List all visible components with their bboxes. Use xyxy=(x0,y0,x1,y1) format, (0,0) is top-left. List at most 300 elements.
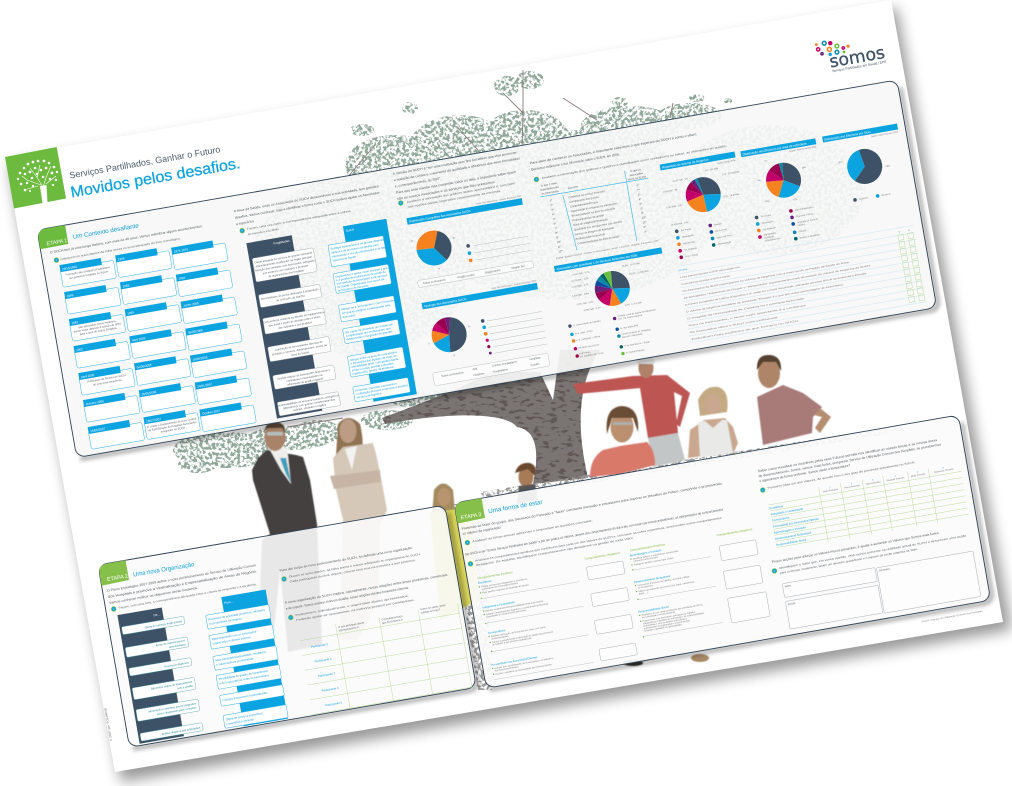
chart: efectivos por area: Área Administrativa xyxy=(795,206,815,212)
step instruction: organigrama xyxy=(281,552,422,585)
SUCH column: Associado xyxy=(342,313,356,319)
table: factores: 3º xyxy=(551,207,554,212)
intro text: O SUCH tem já uma longa história, com mais de 40 anos. Vamos relembrar alguns acontecimentos. xyxy=(50,224,203,255)
table: factores: 1º xyxy=(549,198,552,203)
chart: associados com actividade: H. Universidade de Coimbra xyxy=(573,319,602,327)
fragilidades column: de organizações dos hospitais xyxy=(268,268,305,278)
positive behaviours right: Assegurar, permite e pensar fazer melhor. xyxy=(634,556,675,566)
fragilidades column: maioritariamente localizados na região principal, xyxy=(255,255,313,268)
timeline column 2: de Esterilização de Hospitais Associados xyxy=(148,420,197,432)
table: factores: 2º xyxy=(640,206,643,211)
missao text: A missão do SUCH é "ser uma instituição sem fins lucrativos que visa promover xyxy=(392,150,518,176)
positive behaviours right: profissionais e com as aptidões específicas a xyxy=(643,617,688,628)
chart: volume de negocios: Repartição do Volume de Negócios xyxy=(662,157,709,170)
fragilidades column: Fragilidades xyxy=(273,239,290,246)
values rating table: Desenvolvimento Sustentável xyxy=(775,530,812,541)
step instruction: relations: C xyxy=(290,617,292,619)
timeline column 3 xyxy=(171,238,256,432)
chart: efectivos por area: 18% xyxy=(765,201,770,203)
table: factores: 11º xyxy=(642,220,647,225)
table: factores: 9º xyxy=(556,235,559,240)
chart: associados com actividade: H. S. João – Porto xyxy=(575,329,594,336)
timeline column 2: 1995 xyxy=(127,310,135,315)
column: para xyxy=(203,589,288,729)
table: factores: O que os xyxy=(630,167,642,173)
timeline column 3: 1973-1975 xyxy=(173,247,189,254)
participants table: Participante 1 xyxy=(311,642,329,649)
chart: tipologia dos associados: Fundos xyxy=(530,362,540,367)
positive behaviours left: Partilhar informação, de forma aberta e clara, com outras xyxy=(491,625,547,638)
chart: volume de negocios: 7.292,5M€ · 10% xyxy=(666,205,683,210)
missao text xyxy=(392,150,524,201)
chart: efectivos por area: Instalação xyxy=(764,235,775,240)
table: factores: 4º xyxy=(638,197,641,201)
chart: efectivos por sexo: 35% xyxy=(838,161,843,164)
chart: associados com actividade: Associados com actividade 1 de Serviços Atribuídos em 2006 xyxy=(556,253,638,271)
true or false checklist: As actividades "Tratamento de Roupa" e "Alimentação" representaram mais da metade do Volume de Negócios do SUCH. xyxy=(683,264,872,300)
chart: associados com actividade: 3.073,2M€ · 4,2% xyxy=(571,278,589,283)
chart: associados com actividade: (CH, CS, Pedro Hispano) xyxy=(618,314,643,321)
logo: somos xyxy=(815,31,887,75)
copyright: © 2007 por SOLARGE xyxy=(103,707,113,742)
timeline column 1: Outubro 2006 xyxy=(85,399,104,406)
tree branches above xyxy=(287,70,673,427)
table: factores: 8º xyxy=(555,231,558,235)
table: factores: 11º xyxy=(557,244,562,249)
timeline column 1: Abril 2006 xyxy=(81,373,95,379)
chart: volume de negocios: Administração xyxy=(717,241,732,246)
table: factores: 7º xyxy=(554,226,557,230)
etapa 3 intro: Pretende-se fazer do grupo, dos Sucessos do Passado e "fazer" constante inovação e entusiasmo para superar os Desafios do Futuro, cumprindo e promovendo xyxy=(461,481,722,531)
participants table: Participante 2 xyxy=(314,657,332,664)
chart: associados com actividade: Macedo e Mirandela) xyxy=(622,332,643,339)
participants table: interno/externo é: xyxy=(338,625,360,632)
chart: volume de negocios: Tot. Roupa xyxy=(680,227,692,232)
SUCH column: desenvolvem uma gestão de grandes xyxy=(346,329,393,341)
areas de saude intro: desafios. Vamos continuar: logo a identificar a forma como o SUCH poderá ajudar os Associados xyxy=(235,190,380,220)
table: factores: 12º xyxy=(558,249,563,254)
etapa 2 intro: Vamos conhecer melhor os objectivos desta mudança. xyxy=(109,586,198,605)
reinforce text: e agarrarmos de forma uniforme. Vamos medir a temperatura? xyxy=(759,463,851,483)
column: de: Processos dispersos xyxy=(164,660,190,669)
values rating table: Muito Presente xyxy=(911,472,926,478)
logo: wordmark: somos xyxy=(828,43,887,72)
table: factores: Capacidade de resposta às solicitações xyxy=(570,201,618,213)
fragilidades column: de currículos da marcha xyxy=(276,293,305,302)
timeline column 2: 26/05/2006 xyxy=(141,390,157,396)
fragilidades column: Grande volume de transacções financeiras e xyxy=(277,368,331,381)
form box: desenho xyxy=(876,551,981,613)
values rating table: 3 xyxy=(872,479,874,482)
person: red long-sleeved shirt xyxy=(573,356,690,467)
step instruction: identifiquem: para o reforçar. Finalmente, façam um desenho quantificado e o impacto da acção proposta na Valor. xyxy=(780,547,918,575)
timeline column 3: Outubro 2007 xyxy=(202,409,221,416)
perceptions intro: Para além de conhecer os Associados, é importante sabermos o que esperam do SUCH e como o vêem. xyxy=(530,132,698,165)
column: para: Funções transversais especializadas xyxy=(222,690,268,702)
reinforce text: de desenvolvimento. Juntos, vamos, mais fortes, enriquecer Serviço de Utilização Comum dos Hospitais, se percebermos xyxy=(758,442,942,478)
values rating table: Responsabilidade Social xyxy=(776,538,807,547)
positive behaviours left: Comportamentos Positivos xyxy=(477,570,513,580)
step instruction: pontuem xyxy=(760,460,916,493)
column: de: Informação e sistemas pouco integrados xyxy=(148,701,197,714)
step 3 instruction: Analisem a informação dos gráficos abaixo apresentados e, com base xyxy=(406,181,516,204)
true or false checklist: O Hospital da Universidade de Coimbra foi o principal Associado. xyxy=(687,297,806,320)
positive behaviours left: Assumir compromissos/responsabilidade pelas suas acções. xyxy=(485,599,544,613)
column: para: Relacionamento com os Associados xyxy=(211,629,257,641)
timeline column 1: Publicação da Revista do SUCH xyxy=(87,373,126,384)
fragilidades column: produtos e serviços, departamentos, dentro da xyxy=(272,343,328,356)
participants table: Como se sente, pode xyxy=(420,603,446,611)
chart: volume de negocios: Dados: Relat. 2006 xyxy=(717,159,736,165)
table: factores: Presença/Apoio na área de actuação xyxy=(571,206,616,218)
chart: associados com actividade: 5.000,7M€ · 6,9% xyxy=(577,301,594,306)
true or false checklist: A maior parte dos Associados do SUCH está em Região Norte. xyxy=(680,266,741,279)
SUCH column: rentabilidade geral, com gestão rápida, xyxy=(351,357,399,369)
values rating table: Integridade e Honestidade xyxy=(770,507,804,516)
step instruction: relations: Podendo ajudar-se mutuamente, na melhoria possível por participantes. xyxy=(296,598,415,622)
step 1 instruction xyxy=(53,236,181,263)
true or false checklist: Os Associados do SUCH participaram no Volume de Negócios com a maior quota na Região de Saúde do Norte. xyxy=(682,261,851,293)
positive behaviours right: Aprendizagem e Inovação xyxy=(629,548,662,558)
chart: volume de negocios: 14.428,2M€ · 19% xyxy=(671,222,689,227)
positive behaviours right: Utilizar racionalmente os recursos (luz, água, consumíveis, xyxy=(638,580,695,593)
chart: volume de negocios: 27% · 20.998,2M€ xyxy=(722,171,740,176)
step instruction: identifiquem: D xyxy=(774,570,776,573)
step 4 instruction: Analisem a informação dos gráficos e quadros e classifiquem como verdadeiros ou falsas, as afirmações do quadro. xyxy=(541,144,727,180)
chart: associados com actividade xyxy=(554,247,678,364)
table: factores: 5º xyxy=(552,217,556,221)
timeline column 1: São aprovados novos estatutos, xyxy=(78,319,117,329)
SUCH column xyxy=(325,219,417,405)
timeline column 3: 18/09/2006 xyxy=(192,355,208,362)
timeline column 1: Formação das Unidades Hospitalares xyxy=(65,265,111,277)
person: man in suit xyxy=(252,422,322,652)
fragilidades column: Concorrência reduzida na difusão de equipamentos xyxy=(263,310,325,324)
fragilidades column xyxy=(246,232,342,419)
timeline column 1: 26/05/2007 xyxy=(90,427,106,433)
etapa 1 tab xyxy=(37,225,68,249)
positive behaviours left: Adoptar comportamentos rigorosos e o cumprimento profissional, xyxy=(486,602,549,616)
participants table: Participante 4 xyxy=(321,686,339,693)
step instruction: organigrama: B xyxy=(283,579,286,581)
step instruction: Façam, com uma seta, a correspondência adequada entre a coluna da esquerda e a da direita. xyxy=(118,582,257,610)
timeline column 2: Integrados no SUCH xyxy=(160,425,186,434)
positive behaviours left: áreas/actividades. xyxy=(491,635,509,641)
participants table xyxy=(298,601,472,715)
true or false checklist: Para os Associados, o factor mais importante é a confiança. xyxy=(688,304,808,327)
values rating table: Mais Reduzida xyxy=(866,481,881,486)
SUCH column: serviços de logística xyxy=(356,391,382,400)
values text: Ser SUCH é ser "Somos Serviços Partilhados em Saúde" e pôr em prática os Valores, através dos comportamentos do dia-a-dia, com base nas nossas experiências, as interpretações de comportamentos xyxy=(465,508,724,557)
column: de: Diferentes regras de financiamento xyxy=(151,680,193,691)
SUCH column: Alargar todos os tipos de contratações xyxy=(350,350,398,362)
table: factores: Contas prestadas da área da saúde xyxy=(577,234,620,245)
positive behaviours left: respeitando os compromissos assumidos. xyxy=(486,609,527,619)
etapa 1 title: Um Contexto desafiante xyxy=(72,222,140,241)
table: factores: 10º xyxy=(557,240,561,244)
step 3 instruction: nas opções dadas, legendem correctamente as mesmas. xyxy=(407,189,502,209)
logo: tagline: Serviços Partilhados em Saúde | EPE xyxy=(832,60,887,73)
chart: tipologia dos associados: Centros Hospitalares xyxy=(492,359,518,368)
positive behaviours left: de trabalho e das relações estabelecidas. xyxy=(492,637,533,646)
positive behaviours right: Proporcionar, com Associados, actividades de trabalho, xyxy=(642,611,696,623)
table: factores: 3º xyxy=(644,229,647,234)
chart: associados com actividade: 6.680,2M€ · 9,1% xyxy=(584,307,601,312)
table: factores: Serviço de imagem do Associado xyxy=(574,226,615,236)
values rating table: 5 xyxy=(917,472,919,474)
chart: volume de negocios: 2.180,7M€ · 3% xyxy=(673,178,688,183)
positive behaviours left: Excelência xyxy=(478,579,492,585)
column: de: Oferta de serviços fragmentada xyxy=(144,619,183,629)
mottled ground between panels xyxy=(448,425,905,690)
table: factores: Confiança no serviço fornecido xyxy=(568,189,605,199)
step 2 instruction xyxy=(239,209,352,238)
negative behaviours left xyxy=(583,551,639,661)
chart: efectivos por area: Projectos e Obras xyxy=(796,212,814,218)
positive behaviours left: Assumir que, genuinamente, as necessidades e os objectivos xyxy=(494,657,555,670)
fragilidades column: Oferta alargada de serviços de grande variedade xyxy=(254,250,313,265)
chart: efectivos por sexo: Efectivos xyxy=(881,192,892,197)
participants table: Participante 5 xyxy=(325,700,343,707)
table: factores: os Associados xyxy=(541,189,560,196)
values rating table: 6 xyxy=(943,467,945,469)
column: para: e de boas práticas, entre os funcionários xyxy=(219,673,270,686)
timeline column 1 xyxy=(59,256,145,449)
step instruction xyxy=(111,582,257,612)
timeline column 1: de uma nova frequência xyxy=(93,378,122,387)
column: para: organizados e clientes internos xyxy=(212,635,251,646)
true or false checklist: Trabalham mais mulheres do que homens no SUCH. xyxy=(691,319,800,341)
header: green logo square with tree xyxy=(5,147,66,208)
fragilidades column: aos sectores com unidades e produtos xyxy=(262,263,309,275)
panel: etapa 1 - um contexto desafiante xyxy=(37,80,939,460)
chart: efectivos por sexo: 65% xyxy=(886,165,890,168)
positive behaviours left: Proximidade aos Associados/Clientes xyxy=(491,655,538,667)
positive behaviours right: adequadas às condições de sua função e, às responsabilidades xyxy=(643,611,705,625)
positive behaviours right: a troca de conhecimentos. xyxy=(633,556,659,563)
step 1 instruction: Coloquem os autocolantes da folha anexa no local adequado do friso cronológico. xyxy=(60,236,181,261)
chart: volume de negocios: Seg. Cont. Tecn. xyxy=(716,234,733,239)
true or false checklist xyxy=(677,225,927,343)
chart: efectivos por sexo: Auxiliares xyxy=(859,196,869,201)
table: factores: O que é mais xyxy=(541,181,558,188)
chart: volume de negocios: Proj. e Obras xyxy=(685,253,699,258)
column: de: De… xyxy=(153,612,161,617)
table: factores: importante para xyxy=(540,185,560,192)
chart: distribuicao geografica: Nota: Rel. Associados · Dados: Fevereiro 2007 xyxy=(476,195,522,206)
column: para: Para… xyxy=(224,599,234,605)
column: para: Oferta de serviços específicos xyxy=(225,711,264,721)
SUCH column: é a partilha de profissionais de saúde da xyxy=(336,270,386,282)
chart: efectivos por area: 9% xyxy=(757,180,761,182)
chart: volume de negocios: 2.456,1M€ · 3% xyxy=(662,189,678,194)
chart: volume de negocios: Alimentação xyxy=(682,234,695,239)
etapa 2 tab xyxy=(98,560,129,586)
column: para: e por domínios de negócio xyxy=(209,616,242,626)
form box: desenho: Desenho: xyxy=(879,567,891,573)
SUCH column: e formações das equipas de nível, da xyxy=(350,354,397,366)
person: woman in beige blazer xyxy=(330,418,387,640)
values rating table: Bastante Presente xyxy=(886,476,905,482)
etapa 2 title: Uma nova Organização xyxy=(133,561,195,579)
fragilidades column: cadeias, unidades e regiões xyxy=(293,402,327,412)
chart: distribuicao geografica: Todos os Resumos xyxy=(423,277,446,285)
column: para: Possibilidade de gestão de experiências xyxy=(218,669,269,681)
chart: associados com actividade: 3.431,8M€ · 4,7% xyxy=(571,284,589,289)
values rating table: Excelência xyxy=(769,504,784,510)
form box: valor xyxy=(782,568,877,598)
positive behaviours left: Integridade e Honestidade xyxy=(482,600,516,610)
person: man in coral t-shirt xyxy=(590,406,655,477)
step instruction: comportamentos: desejáveis. De seguida, identifiquem comportamentos não desejáveis na gestão de cada Valor. xyxy=(476,536,634,567)
chart: associados com actividade: H. de São Marcos – Braga xyxy=(624,340,651,348)
SUCH column: de Saúde. Organização com novos de xyxy=(337,277,385,289)
SUCH column: conter a longa, permite a desafios, xyxy=(351,361,395,372)
chart: distribuicao geografica: Região Centro xyxy=(457,272,475,279)
chart: tipologia dos associados: 8 xyxy=(428,343,431,345)
tree trunk xyxy=(382,350,600,484)
step 1 instruction: A xyxy=(56,259,58,262)
etapa 2 intro: O Plano Estratégico 2007-2009 define o novo posicionamento do Serviço de Utilização Comum xyxy=(107,563,256,593)
chart: distribuicao geografica: 15 xyxy=(438,268,441,271)
logo: coloured rings xyxy=(815,37,850,58)
table: factores: 5º xyxy=(636,183,639,187)
table: factores: 2º xyxy=(550,203,553,207)
timeline column 1: 1969 xyxy=(66,293,74,298)
chart: associados com actividade: 3.440,7M€ · 4,7% xyxy=(572,272,590,277)
missao text: a redução de custos e o aumento de qualidade e eficiência dos seus Associados xyxy=(393,156,521,182)
chart: volume de negocios: AP. Ao Trab. xyxy=(715,228,728,233)
values rating table: Proximidade aos Associados/Clientes xyxy=(772,517,820,529)
values rating table: Transparência xyxy=(771,515,790,523)
chart: tipologia dos associados: Hospitais xyxy=(473,371,485,377)
true or false checklist: Em 2006... xyxy=(678,268,690,272)
chart: associados com actividade: CH do Nordeste (H. Bragança, xyxy=(621,328,652,336)
SUCH column: Implementar o gestor como Hospital o que xyxy=(335,266,388,279)
timeline column 2: 1988 xyxy=(122,283,130,288)
SUCH column: organização, gestão de eficiência xyxy=(352,365,394,376)
table: factores: 1º xyxy=(638,192,641,197)
fragilidades column: (Ministérios), com grande complexidade das xyxy=(283,397,336,410)
form box: accao xyxy=(785,585,883,629)
chart: efectivos por sexo: Dados: Data Fevereiro 2006 xyxy=(871,130,899,138)
table: factores: Associados xyxy=(629,171,644,177)
values rating table: Pouco Presente xyxy=(844,484,861,490)
participants table: O seu principal cliente xyxy=(338,620,365,629)
chart: distribuicao geografica: Região Sul xyxy=(511,264,525,270)
step instruction: comportamentos: B xyxy=(470,563,472,566)
step instruction: pontuem: C xyxy=(762,490,764,492)
table: factores: vêem no SUCH xyxy=(627,174,647,182)
SUCH column: a utilização de forma e serviços e desafios xyxy=(356,383,409,396)
chart: distribuicao geografica xyxy=(406,195,535,288)
positive behaviours left: Prestar serviços que ultrapassem e excedam as xyxy=(481,577,529,589)
chart: tipologia dos associados: 14 xyxy=(453,355,456,357)
positive behaviours right: Comportamentos Positivos xyxy=(629,542,666,552)
fragilidades column: Colocação de necessidades diversas de xyxy=(275,340,323,352)
chart: tipologia dos associados: Todos os Resumos xyxy=(441,370,465,378)
table: factores: Profissionalismo da gestão xyxy=(572,213,605,222)
chart: volume de negocios: 1% · 684,2M€ xyxy=(705,168,719,172)
timeline column 2: 04/06/2005 xyxy=(136,363,152,369)
positive behaviours left: Escutar e identificar as necessidades dos Clientes/Utentes. xyxy=(495,663,553,676)
etapa 2 intro xyxy=(107,563,259,605)
participants table: cultivar-se hoje? xyxy=(420,607,441,615)
form box: valor: Valor: xyxy=(784,583,792,588)
step instruction: identifiquem: Identifiquem o Valor que, em vossa opinião, está menos presente na realidade actual do SUCH e descrevam uma acção xyxy=(779,533,967,570)
table: factores: Fonte: Estudo SUCH - Como os Associados vêem o SUCH - Dados: Fevereiro 2007 xyxy=(556,239,661,260)
positive behaviours right: Desenvolver processos de trabalho, de forma a utilizar xyxy=(637,575,690,587)
chart: distribuicao geografica: 18 xyxy=(410,240,414,243)
form box: accao: Acção: xyxy=(788,601,797,606)
chart: efectivos por sexo: Distribuição dos Efectivos por Sexo xyxy=(824,130,871,142)
chart: efectivos por area: 36% xyxy=(802,167,806,170)
organisation text: Para dar corpo ao novo posicionamento do SUCH, foi definida uma nova organização. xyxy=(279,546,413,573)
chart: tipologia dos associados: Hospitais xyxy=(529,355,541,361)
timeline column 1: 1983 xyxy=(71,320,79,325)
chart: volume de negocios: Tot. Ambiente xyxy=(684,246,698,252)
areas de saude intro xyxy=(233,184,381,226)
positive behaviours right: Desenvolvimento Sustentável xyxy=(634,574,671,584)
step instruction: fichas xyxy=(464,518,593,546)
table: factores: 4º xyxy=(552,212,555,216)
SUCH column: comunidade de Associados e de serviços xyxy=(336,273,388,286)
areas de saude intro: A Área da Saúde, onde os Associados do SUCH desenvolvem a sua actividade, tem grandes xyxy=(233,184,379,213)
chart: efectivos por area: Manutenção, xyxy=(763,231,777,237)
step 3 instruction: C xyxy=(400,203,402,205)
panel: etapa 3 - uma forma de estar xyxy=(454,415,995,699)
fragilidades column: dos cuidados e dos produtos xyxy=(278,320,313,330)
missao text: Para que esta missão seja cumprida, todos os dias, é importante saber quem xyxy=(396,170,517,195)
chart: distribuicao geografica: Distribuição Geográfica dos Associados SUCH xyxy=(409,209,471,224)
participants table: Participante 3 xyxy=(318,671,336,678)
column: para: e valorização de produtividade xyxy=(216,656,254,667)
chart: efectivos por area xyxy=(740,138,832,247)
column: para: competitiva e eficiente xyxy=(226,717,254,726)
timeline column 3: 1994 xyxy=(178,276,186,281)
positive behaviours right: Responsabilidade Social xyxy=(638,605,669,614)
chart: efectivos por area: 1% xyxy=(764,160,767,163)
true or false checklist: F xyxy=(909,230,911,232)
SUCH column: SUCH xyxy=(345,227,354,233)
reinforce text: Saber como visualizar os incentivos pelas seus Futuros permite-nos identificar as nossas forças e as nossas áreas xyxy=(757,438,938,473)
chart: tipologia dos associados: Nota: Rel. Associados · Dados: Fevereiro 2007 xyxy=(491,279,537,290)
person: woman in white top xyxy=(688,387,738,458)
column: de: desenvolvidas xyxy=(169,642,187,649)
areas de saude intro: a superá-los. xyxy=(236,219,255,226)
header: main title: Movidos pelos desafios. xyxy=(69,155,242,201)
negative behaviours right xyxy=(716,527,770,623)
chart: efectivos por area: 25% xyxy=(793,199,798,202)
chart: associados com actividade: CH Médio Ave & Aves xyxy=(578,343,600,350)
person: boy behind trunk xyxy=(515,463,538,504)
chart: associados com actividade: (Cl. Geral/Ext./St.ª Cruz) xyxy=(580,351,604,359)
perceptions intro: Queremos relacionar a sua informação sobre o SUCH, em 2006. xyxy=(531,152,620,172)
chart: efectivos por area: Tot. Ambiente xyxy=(763,226,777,231)
column: para: Processos de actividade produtivos, eficientes xyxy=(208,608,266,621)
step 2 instruction: B xyxy=(241,230,244,233)
chart: efectivos por area: Estudos e Qualidade xyxy=(800,233,821,240)
participants table: O produto/serviço xyxy=(381,614,403,622)
relationships text: e de suporte. Vamos analisar, mais em detalhe, essas relações-clientes fornecedor internas. xyxy=(285,586,409,611)
positive behaviours right: Identificar saberes e experiências, promovendo xyxy=(633,550,679,561)
chart: distribuicao geografica: 36 xyxy=(453,237,456,240)
table: factores: Qualidade dos serviços face aos clientes xyxy=(574,219,623,232)
timeline column 3: 24/01/2007 xyxy=(197,382,213,389)
values rating table: 2 xyxy=(851,483,853,485)
column: de: pouco disponíveis para o negócio xyxy=(157,705,197,716)
positive behaviours left: dos Associados/Clientes. xyxy=(495,665,520,672)
